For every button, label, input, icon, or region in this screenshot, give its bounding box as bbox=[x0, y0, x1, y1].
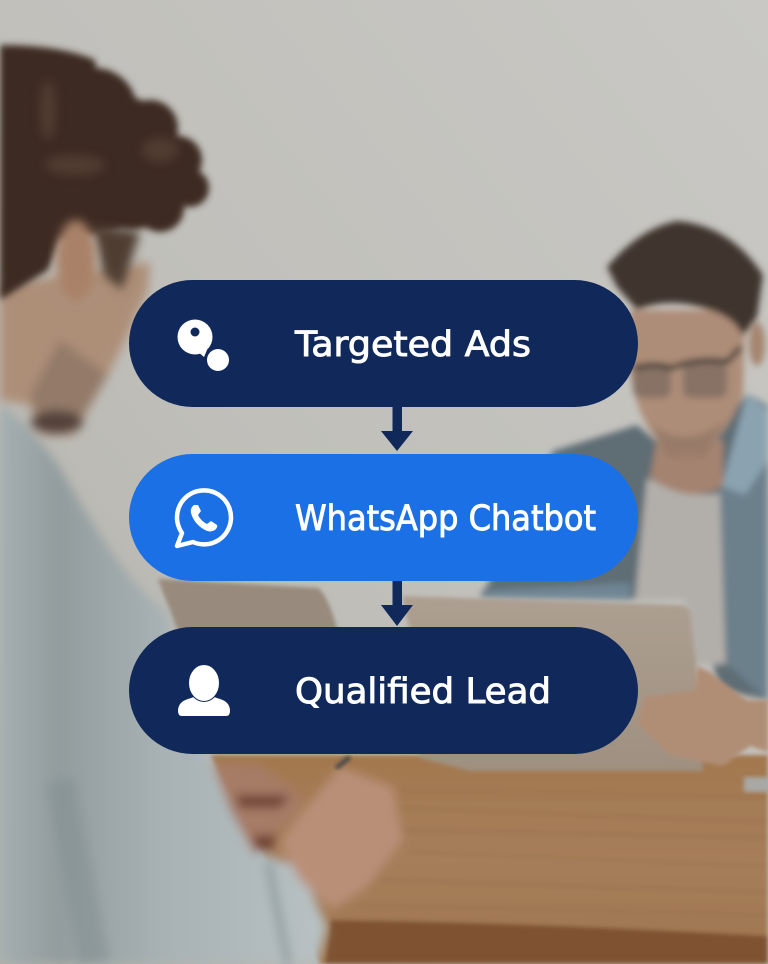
neck bbox=[650, 440, 723, 494]
step: Targeted Ads bbox=[129, 280, 638, 407]
t-shirt bbox=[635, 478, 726, 665]
glasses bbox=[633, 347, 741, 398]
arrow: chatbot to lead bbox=[381, 579, 413, 626]
rear laptop left bbox=[158, 579, 338, 632]
hair highlights bbox=[40, 80, 178, 175]
jacket bbox=[480, 394, 768, 700]
label: WhatsApp Chatbot bbox=[295, 499, 596, 539]
wooden table bbox=[210, 755, 768, 964]
icon: WhatsApp logo bbox=[177, 490, 231, 546]
sideburn bbox=[92, 225, 140, 290]
neck and face left bbox=[0, 262, 150, 435]
icon: speech bubble and dot bbox=[178, 320, 229, 371]
icon: person bbox=[178, 664, 230, 716]
right person bbox=[480, 221, 768, 700]
face bbox=[630, 310, 745, 455]
hair left bbox=[0, 45, 209, 300]
left person bbox=[0, 403, 403, 964]
step: Qualified Lead bbox=[129, 627, 638, 754]
label: Targeted Ads bbox=[294, 325, 531, 365]
hair bbox=[607, 221, 763, 336]
label: Qualified Lead bbox=[295, 672, 551, 712]
phone on table bbox=[744, 777, 768, 792]
shirt bbox=[0, 403, 327, 964]
front hand bbox=[280, 767, 403, 910]
back hand bbox=[213, 763, 303, 855]
pen bbox=[336, 757, 350, 768]
hands right bbox=[637, 666, 768, 766]
rear laptop right bbox=[402, 596, 703, 771]
ear bbox=[56, 220, 96, 300]
arrow: ads to chatbot bbox=[381, 405, 413, 451]
step: WhatsApp Chatbot bbox=[129, 454, 638, 581]
